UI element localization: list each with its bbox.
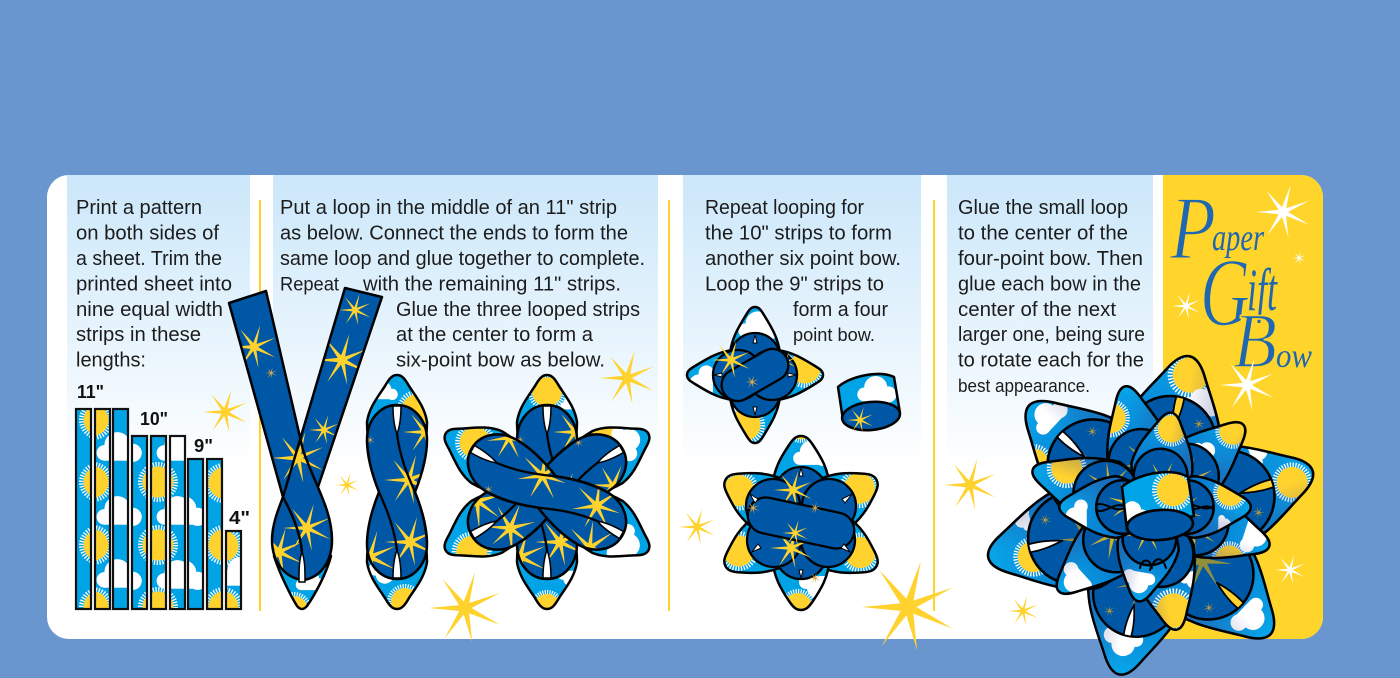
text: step 2 instructions: same loop and glue together to complete. bbox=[280, 248, 645, 270]
panel: step 1 background bbox=[67, 175, 250, 615]
bow tier: outer six petals bbox=[986, 354, 1314, 676]
text: step 3 instructions: point bow. bbox=[793, 324, 875, 345]
text: step 4 instructions: to rotate each for the bbox=[958, 350, 1144, 372]
text: step 1 instructions: lengths: bbox=[76, 350, 146, 372]
text: step 1 instructions: printed sheet into bbox=[76, 274, 232, 296]
looped strip: V shape bbox=[225, 285, 385, 626]
bow center loop bbox=[1118, 472, 1194, 542]
yellow sparkles bbox=[203, 351, 1038, 651]
text: step 3 instructions bbox=[705, 197, 901, 345]
text: step 4 instructions bbox=[958, 197, 1145, 396]
strip length labels: 4" bbox=[229, 508, 250, 528]
heading: Paper Gift Bow title: ow bbox=[1276, 338, 1312, 375]
text: step 2 instructions: at the center to form a bbox=[396, 324, 594, 346]
small loop bbox=[838, 374, 901, 432]
text: step 1 instructions: Print a pattern bbox=[76, 197, 202, 219]
nine printed paper strips bbox=[74, 408, 242, 610]
text: step 2 instructions: as below. Connect the ends to form the bbox=[280, 222, 628, 244]
heading: Paper Gift Bow title: ift bbox=[1247, 257, 1278, 323]
strip length labels bbox=[77, 382, 250, 528]
bow tier: middle six petals bbox=[1031, 385, 1271, 631]
heading: Paper Gift Bow title: aper bbox=[1212, 217, 1264, 259]
text: step 4 instructions: best appearance. bbox=[958, 375, 1090, 396]
white sparkles on title panel bbox=[1172, 185, 1309, 584]
text: step 4 instructions: larger one, being sure bbox=[958, 324, 1145, 346]
strip length labels: 11" bbox=[77, 382, 104, 402]
text: step 1 instructions bbox=[76, 197, 232, 372]
panel: yellow title panel bbox=[1163, 175, 1323, 639]
bow tier: inner four petals bbox=[1059, 407, 1251, 607]
six-point bow from 11 inch strips bbox=[443, 374, 651, 610]
strip length labels: 10" bbox=[140, 409, 168, 429]
text: step 2 instructions: Glue the three looped strips bbox=[396, 299, 640, 321]
six-point bow from 10 inch strips bbox=[723, 434, 879, 612]
text: step 1 instructions: strips in these bbox=[76, 324, 201, 346]
text: step 3 instructions: form a four bbox=[793, 299, 888, 321]
finished layered gift bow bbox=[986, 354, 1314, 676]
strip length labels: 9" bbox=[194, 436, 213, 456]
text: step 2 instructions bbox=[280, 197, 645, 372]
text: step 2 instructions: Put a loop in the middle of an 11" strip bbox=[280, 197, 617, 219]
text: step 2 instructions: six-point bow as below. bbox=[396, 350, 605, 372]
text: step 3 instructions: the 10" strips to form bbox=[705, 222, 892, 244]
text: step 4 instructions: to the center of the bbox=[958, 222, 1128, 244]
text: step 2 instructions: with the remaining 11" strips. bbox=[362, 274, 621, 296]
panel: step 3 background bbox=[683, 175, 921, 615]
panel: step 2 background bbox=[273, 175, 658, 615]
heading: Paper Gift Bow title: P bbox=[1169, 179, 1216, 278]
text: step 4 instructions: center of the next bbox=[958, 299, 1116, 321]
text: step 1 instructions: a sheet. Trim the bbox=[76, 248, 222, 270]
text: step 1 instructions: nine equal width bbox=[76, 299, 223, 321]
text: step 2 instructions: Repeat bbox=[280, 274, 340, 296]
text: step 3 instructions: Loop the 9" strips to bbox=[705, 274, 884, 296]
heading: Paper Gift Bow title bbox=[1169, 179, 1312, 384]
text: step 3 instructions: another six point bow. bbox=[705, 248, 901, 270]
looped strip: figure eight bbox=[366, 374, 428, 610]
panel: step 4 background bbox=[947, 175, 1153, 615]
four-point bow from 9 inch strips bbox=[685, 305, 825, 445]
text: step 4 instructions: four-point bow. Then bbox=[958, 248, 1143, 270]
heading: Paper Gift Bow title: B bbox=[1233, 297, 1277, 384]
text: step 4 instructions: Glue the small loop bbox=[958, 197, 1128, 219]
card bbox=[47, 175, 1323, 639]
text: step 3 instructions: Repeat looping for bbox=[705, 197, 864, 219]
text: step 1 instructions: on both sides of bbox=[76, 222, 219, 244]
heading: Paper Gift Bow title: G bbox=[1200, 239, 1250, 347]
text: step 4 instructions: glue each bow in the bbox=[958, 274, 1141, 296]
